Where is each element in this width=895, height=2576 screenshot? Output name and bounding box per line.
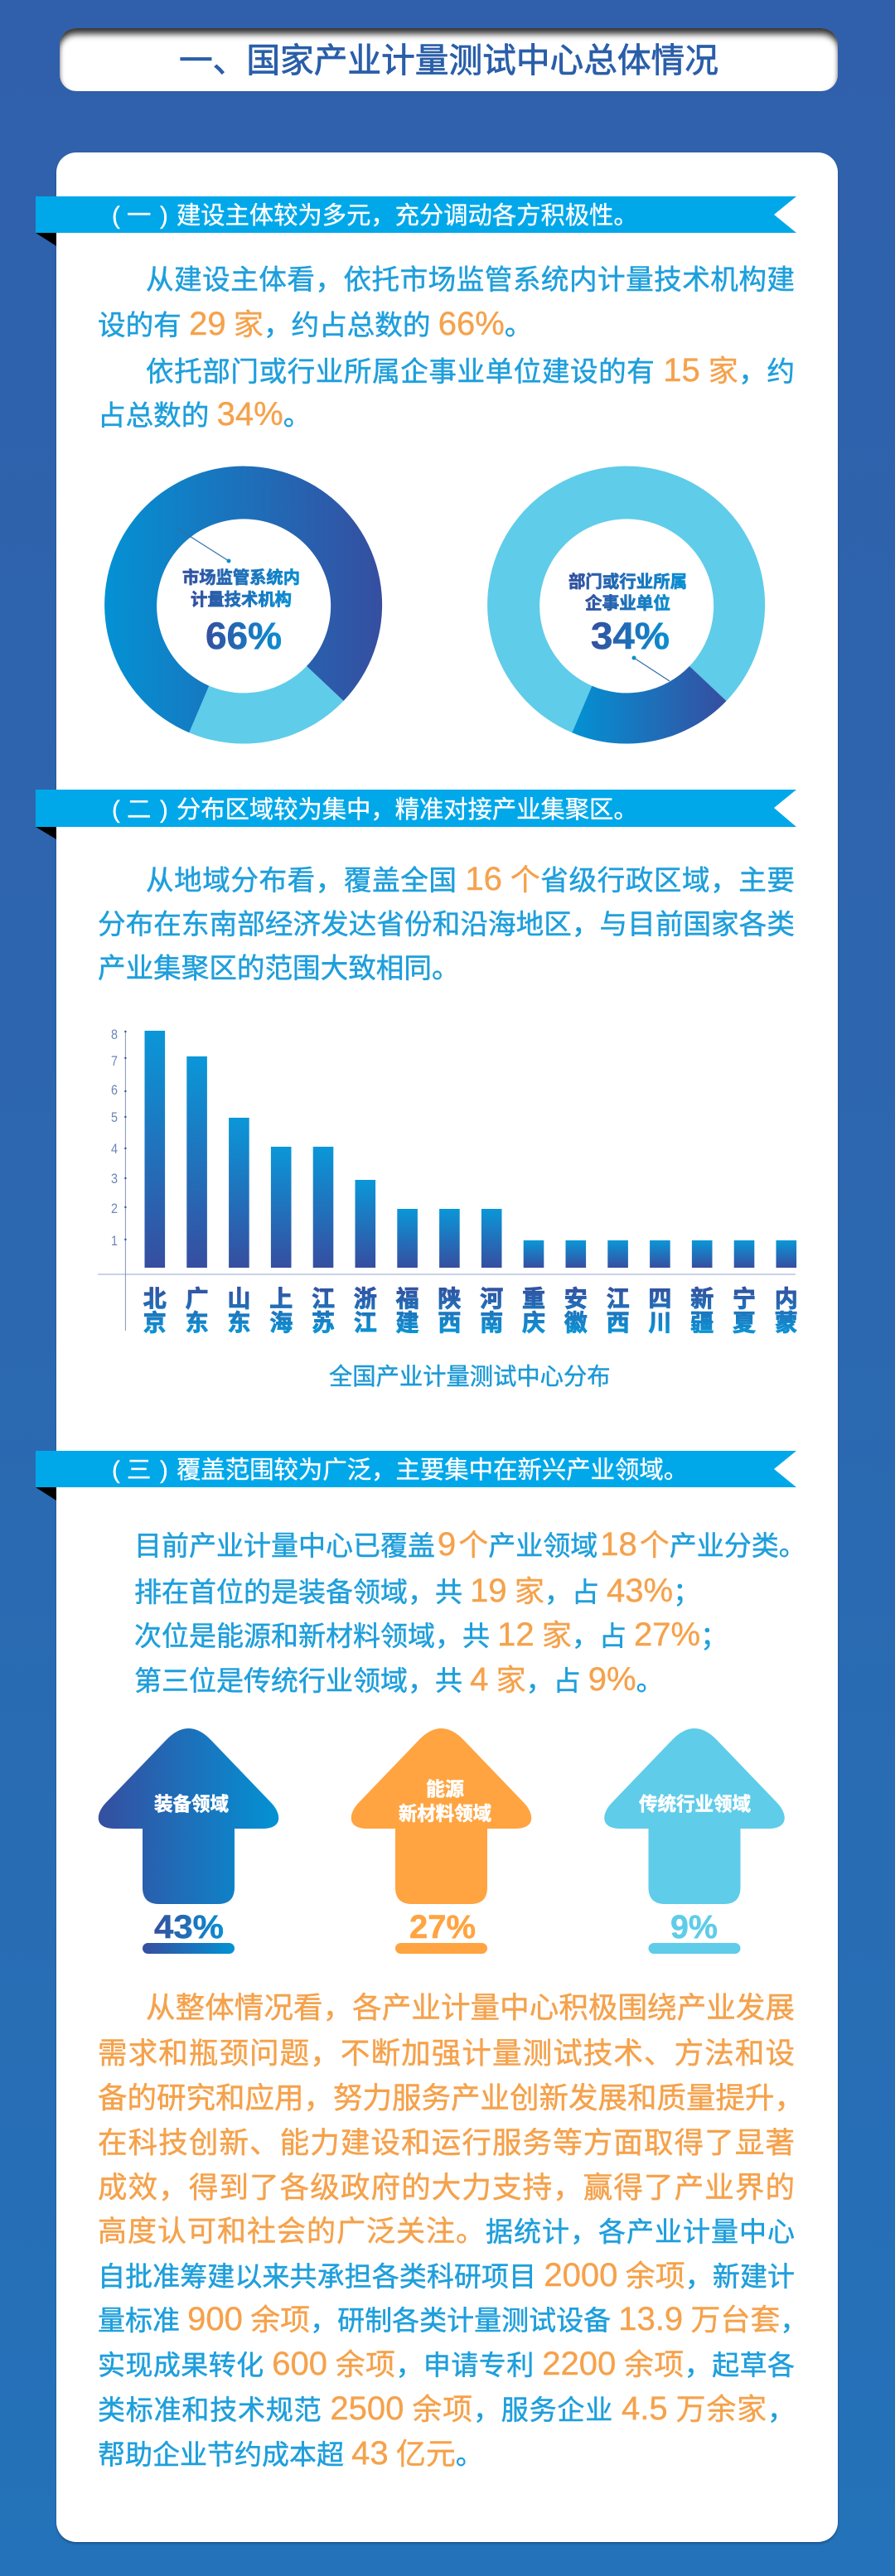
province labels: 夏 xyxy=(733,1310,756,1336)
summary line 6: 高度认可和社会的广泛关注。据统计，各产业计量中心 xyxy=(98,2216,795,2248)
province labels: 东 xyxy=(227,1310,250,1336)
arrow graphics: three leading fields xyxy=(98,1728,785,1954)
panel: section one, construction bodies xyxy=(36,196,796,744)
province labels: 新 xyxy=(690,1286,714,1312)
province labels: 川 xyxy=(648,1310,671,1336)
y axis tick labels: 8 xyxy=(111,1027,118,1042)
text block: overall summary paragraph xyxy=(98,1991,807,2472)
donut chart: market supervision 66%: 66% xyxy=(206,615,282,657)
text: coverage line 1: 目前产业计量中心已覆盖9个产业领域18个产业分类。 xyxy=(134,1526,806,1563)
province labels: 徽 xyxy=(564,1310,588,1336)
panel: section three, industry coverage xyxy=(36,1451,806,1954)
y axis tick labels: 4 xyxy=(111,1141,118,1157)
arrow: traditional industry field 9%: 传统行业领域 xyxy=(639,1793,751,1815)
ribbon heading: section three xyxy=(36,1451,796,1501)
arrow: equipment field 43%: 43% xyxy=(154,1909,224,1945)
y axis tick labels xyxy=(111,1027,118,1249)
ribbon heading: section two: 分布区域较为集中，精准对接产业集聚区。 xyxy=(177,796,638,824)
y axis tick labels: 3 xyxy=(111,1171,118,1187)
text: construction paragraph line 3: 依托部门或行业所属企事业单位建设的有 15 家，约 xyxy=(146,352,795,389)
summary line 5: 成效，得到了各级政府的大力支持，赢得了产业界的 xyxy=(98,2171,795,2204)
donut chart: departments or industries 34% xyxy=(487,466,766,744)
province labels: 海 xyxy=(269,1310,293,1336)
bars xyxy=(144,1031,796,1268)
text: construction paragraph line 1: 从建设主体看，依托市场监管系统内计量技术机构建 xyxy=(146,265,795,296)
province labels: 西 xyxy=(438,1310,461,1336)
province labels: 江 xyxy=(607,1286,630,1312)
ribbon heading: section two: ( xyxy=(112,796,120,824)
title banner: 一、国家产业计量测试中心总体情况 xyxy=(179,41,718,80)
province labels: 河 xyxy=(480,1286,503,1312)
province labels: 陕 xyxy=(438,1286,461,1312)
province labels: 上 xyxy=(269,1286,293,1312)
province labels: 京 xyxy=(143,1310,167,1336)
chart caption: 全国产业计量测试中心分布 xyxy=(329,1363,611,1389)
ribbon heading: section three: ) xyxy=(160,1457,168,1484)
summary line 1: 从整体情况看，各产业计量中心积极围绕产业发展 xyxy=(146,1991,795,2024)
arrow: traditional industry field 9%: 9% xyxy=(670,1909,718,1945)
text: distribution paragraph line 2: 分布在东南部经济发达省份和沿海地区，与目前国家各类 xyxy=(98,910,795,940)
ribbon heading: section one xyxy=(36,196,796,246)
province labels: 苏 xyxy=(312,1310,335,1336)
ribbon heading: section three: ( xyxy=(112,1457,120,1484)
arrow: energy and new materials field 27%: 27% xyxy=(409,1909,476,1945)
province labels: 内 xyxy=(775,1286,798,1312)
axis tick dots xyxy=(124,1031,127,1240)
province labels: 庆 xyxy=(522,1310,545,1336)
province labels: 南 xyxy=(480,1310,503,1336)
panel: section two, regional distribution xyxy=(36,790,798,1389)
ribbon heading: section one: 一 xyxy=(127,202,151,230)
ribbon heading: section three: 三 xyxy=(127,1457,151,1484)
province labels: 宁 xyxy=(733,1286,756,1312)
arrow: traditional industry field 9% xyxy=(604,1728,785,1954)
text: coverage line 4: 第三位是传统行业领域，共 4 家，占 9%。 xyxy=(134,1661,664,1698)
arrow: energy and new materials field 27%: 新材料领域 xyxy=(399,1803,491,1824)
province labels: 福 xyxy=(396,1286,419,1312)
province labels: 山 xyxy=(227,1286,250,1312)
bar chart: centres by province xyxy=(98,1027,798,1336)
donut chart: market supervision 66%: 计量技术机构 xyxy=(191,590,292,610)
summary line 2: 需求和瓶颈问题，不断加强计量测试技术、方法和设 xyxy=(98,2037,795,2070)
y axis tick labels: 1 xyxy=(111,1233,118,1249)
donut chart: departments or industries 34%: 34% xyxy=(591,615,670,657)
ribbon heading: section one: 建设主体较为多元，充分调动各方积极性。 xyxy=(177,202,638,230)
ribbon heading: section three: 覆盖范围较为广泛，主要集中在新兴产业领域。 xyxy=(177,1457,688,1484)
arrow: energy and new materials field 27%: 能源 xyxy=(426,1778,464,1800)
arrow: equipment field 43% xyxy=(99,1728,278,1954)
province labels: 西 xyxy=(607,1310,630,1336)
donut chart: departments or industries 34%: 企事业单位 xyxy=(585,593,670,613)
text: construction paragraph line 2: 设的有 29 家，约占总数的 66%。 xyxy=(98,306,532,342)
y axis tick labels: 5 xyxy=(111,1109,118,1125)
province labels: 安 xyxy=(564,1286,588,1312)
province labels: 江 xyxy=(354,1310,377,1336)
ribbon heading: section one: ( xyxy=(112,202,120,230)
text: construction paragraph line 4: 占总数的 34%。 xyxy=(98,396,311,433)
text: distribution paragraph line 1: 从地域分布看，覆盖全国 16 个省级行政区域，主要 xyxy=(146,861,795,897)
text: coverage line 2: 排在首位的是装备领域，共 19 家，占 43%； xyxy=(134,1573,700,1609)
province labels: 建 xyxy=(396,1310,419,1336)
province labels: 东 xyxy=(186,1310,209,1336)
province labels: 疆 xyxy=(690,1310,714,1336)
donut chart: departments or industries 34%: 部门或行业所属 xyxy=(568,572,687,592)
y axis tick labels: 7 xyxy=(111,1053,118,1069)
province labels: 北 xyxy=(143,1286,167,1312)
title banner xyxy=(60,28,838,91)
text: coverage line 3: 次位是能源和新材料领域，共 12 家，占 27%； xyxy=(134,1617,728,1653)
summary line 7: 自批准筹建以来共承担各类科研项目 2000 余项，新建计 xyxy=(98,2257,795,2293)
summary line 4: 在科技创新、能力建设和运行服务等方面取得了显著 xyxy=(98,2126,795,2159)
arrow: equipment field 43%: 装备领域 xyxy=(154,1793,229,1815)
y axis tick labels: 6 xyxy=(111,1082,118,1098)
province labels: 江 xyxy=(312,1286,335,1312)
text: distribution paragraph line 3: 产业集聚区的范围大致相同。 xyxy=(98,954,460,984)
summary line 3: 备的研究和应用，努力服务产业创新发展和质量提升， xyxy=(98,2081,804,2114)
donut chart: market supervision 66% xyxy=(104,466,383,744)
province labels: 蒙 xyxy=(775,1310,798,1336)
province labels: 浙 xyxy=(354,1286,377,1312)
summary line 11: 帮助企业节约成本超 43 亿元。 xyxy=(98,2435,483,2472)
donut chart: market supervision 66%: 市场监管系统内 xyxy=(182,568,300,587)
province labels: 广 xyxy=(186,1286,209,1312)
ribbon heading: section two: 二 xyxy=(127,796,151,824)
ribbon heading: section two xyxy=(36,790,796,839)
summary line 9: 实现成果转化 600 余项，申请专利 2200 余项，起草各 xyxy=(98,2346,795,2382)
ribbon heading: section two: ) xyxy=(160,796,168,824)
province labels xyxy=(143,1286,798,1336)
summary line 10: 类标准和技术规范 2500 余项，服务企业 4.5 万余家， xyxy=(98,2390,795,2427)
province labels: 四 xyxy=(648,1286,671,1312)
province labels: 重 xyxy=(522,1286,545,1312)
ribbon heading: section one: ) xyxy=(160,202,168,230)
arrow: energy and new materials field 27% xyxy=(351,1728,531,1954)
y axis tick labels: 2 xyxy=(111,1201,118,1216)
summary line 8: 量标准 900 余项，研制各类计量测试设备 13.9 万台套， xyxy=(98,2301,807,2337)
